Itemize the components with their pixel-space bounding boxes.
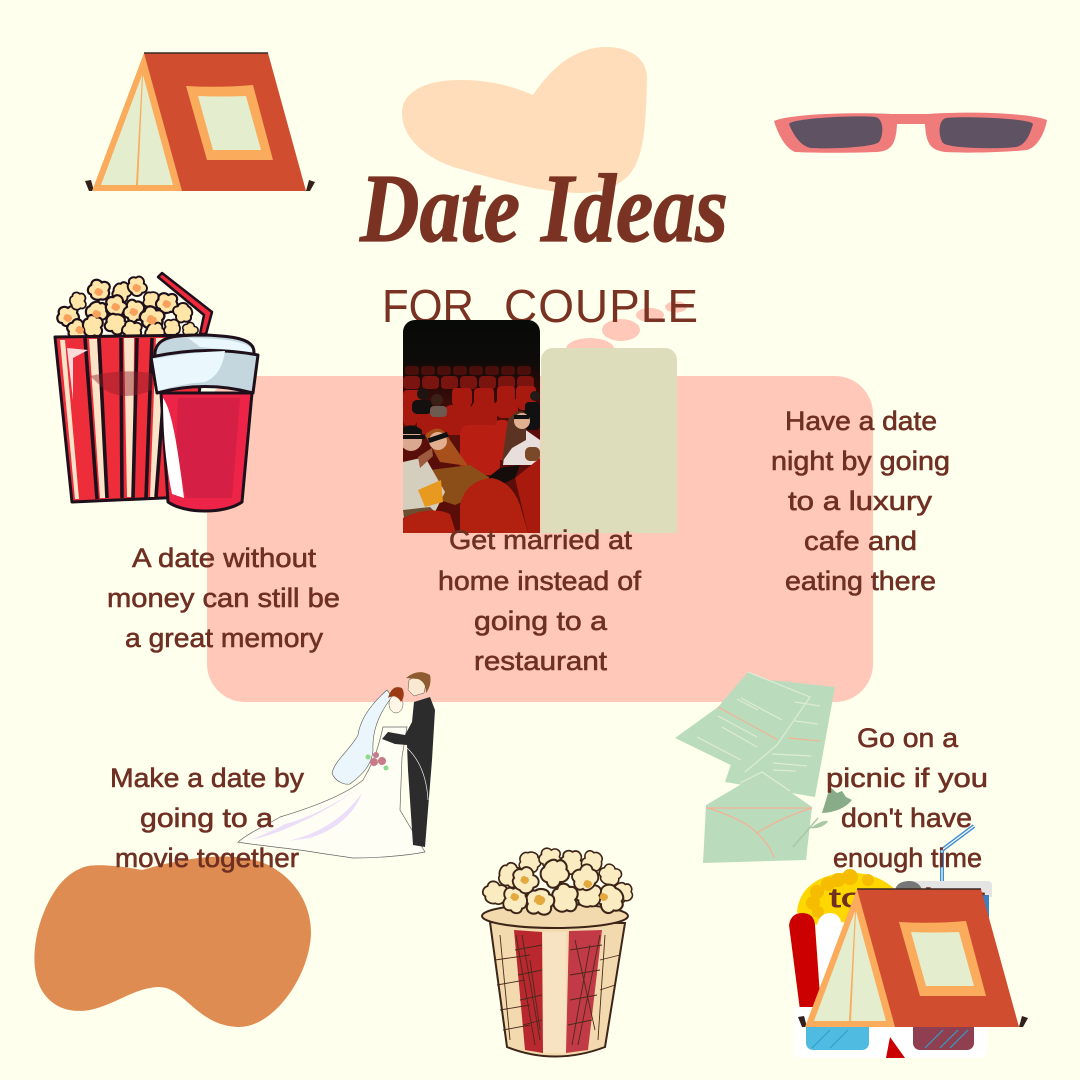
title — [359, 155, 728, 263]
cinema photo — [400, 320, 540, 533]
back row viewers — [412, 388, 540, 430]
front seats — [403, 458, 540, 533]
illustration: bride and groom — [238, 672, 435, 858]
illustration: papers and envelope — [675, 672, 852, 863]
bride head — [389, 695, 403, 713]
text: right column: to a luxury — [788, 486, 933, 516]
text: picnic: don't have — [841, 803, 972, 833]
text: right column: Have a date — [785, 406, 937, 436]
text: left column: money can still be — [107, 583, 340, 613]
text: left column: A date without — [132, 543, 317, 573]
text: picnic: together — [829, 883, 985, 913]
far seat rows — [405, 366, 531, 375]
subtitle — [382, 280, 698, 332]
cup lid band — [151, 350, 258, 393]
dress lavender folds — [250, 788, 362, 841]
text: picnic — [826, 723, 988, 913]
straw — [158, 273, 212, 334]
popcorn kernels — [57, 274, 200, 345]
pink panel — [207, 376, 873, 702]
groom head — [408, 675, 426, 696]
text: centre column — [438, 525, 642, 676]
orange blob — [34, 856, 311, 1027]
straw — [942, 826, 974, 882]
red box stripes — [789, 913, 821, 1010]
text: right column: cafe and — [804, 526, 917, 556]
khaki panel — [541, 348, 677, 533]
text: left column — [107, 543, 340, 653]
bouquet — [366, 752, 388, 770]
text: centre column: Get married at — [449, 525, 633, 555]
text: left column: a great memory — [125, 623, 324, 653]
dress — [238, 727, 425, 858]
text: centre column: restaurant — [474, 646, 608, 676]
text: picnic: Go on a — [857, 723, 959, 753]
pink bubbles — [566, 302, 687, 360]
groom suit — [382, 697, 435, 847]
viewer with white top — [502, 411, 540, 465]
icon: popcorn and soda — [55, 273, 258, 511]
subtitle: FOR — [382, 280, 474, 332]
bucket — [55, 335, 207, 502]
title: Date — [359, 155, 520, 263]
text: centre column: going to a — [474, 606, 608, 636]
viewer with white jacket — [403, 425, 445, 518]
viewer with orange hair — [425, 429, 520, 505]
icon: snack cluster — [789, 826, 992, 1058]
text: right column: eating there — [785, 566, 936, 596]
text: centre column: home instead of — [438, 566, 642, 596]
text: picnic: picnic if you — [826, 763, 988, 793]
icon: tent bottom right — [798, 889, 1028, 1027]
veil — [332, 690, 392, 784]
groom hair — [406, 672, 430, 693]
text: make a date: movie together — [115, 843, 299, 873]
yellow popcorn — [797, 873, 900, 925]
text: make a date: going to a — [140, 803, 274, 833]
text: make a date — [110, 763, 305, 873]
text: right column — [771, 406, 950, 596]
title: Ideas — [540, 155, 728, 263]
icon: tent top left — [85, 53, 315, 191]
cup lid — [895, 881, 992, 897]
icon: sketched popcorn bucket — [479, 846, 635, 1056]
icon: sunglasses — [774, 113, 1047, 153]
3D glasses — [794, 1007, 987, 1058]
text: make a date: Make a date by — [110, 763, 305, 793]
bride hair — [388, 687, 404, 702]
subtitle: COUPLE — [504, 280, 698, 332]
cup body — [161, 393, 252, 511]
peach heart blob — [402, 47, 647, 193]
text: right column: night by going — [771, 446, 950, 476]
cup lid top — [155, 335, 254, 358]
text: picnic: enough time — [833, 843, 982, 873]
